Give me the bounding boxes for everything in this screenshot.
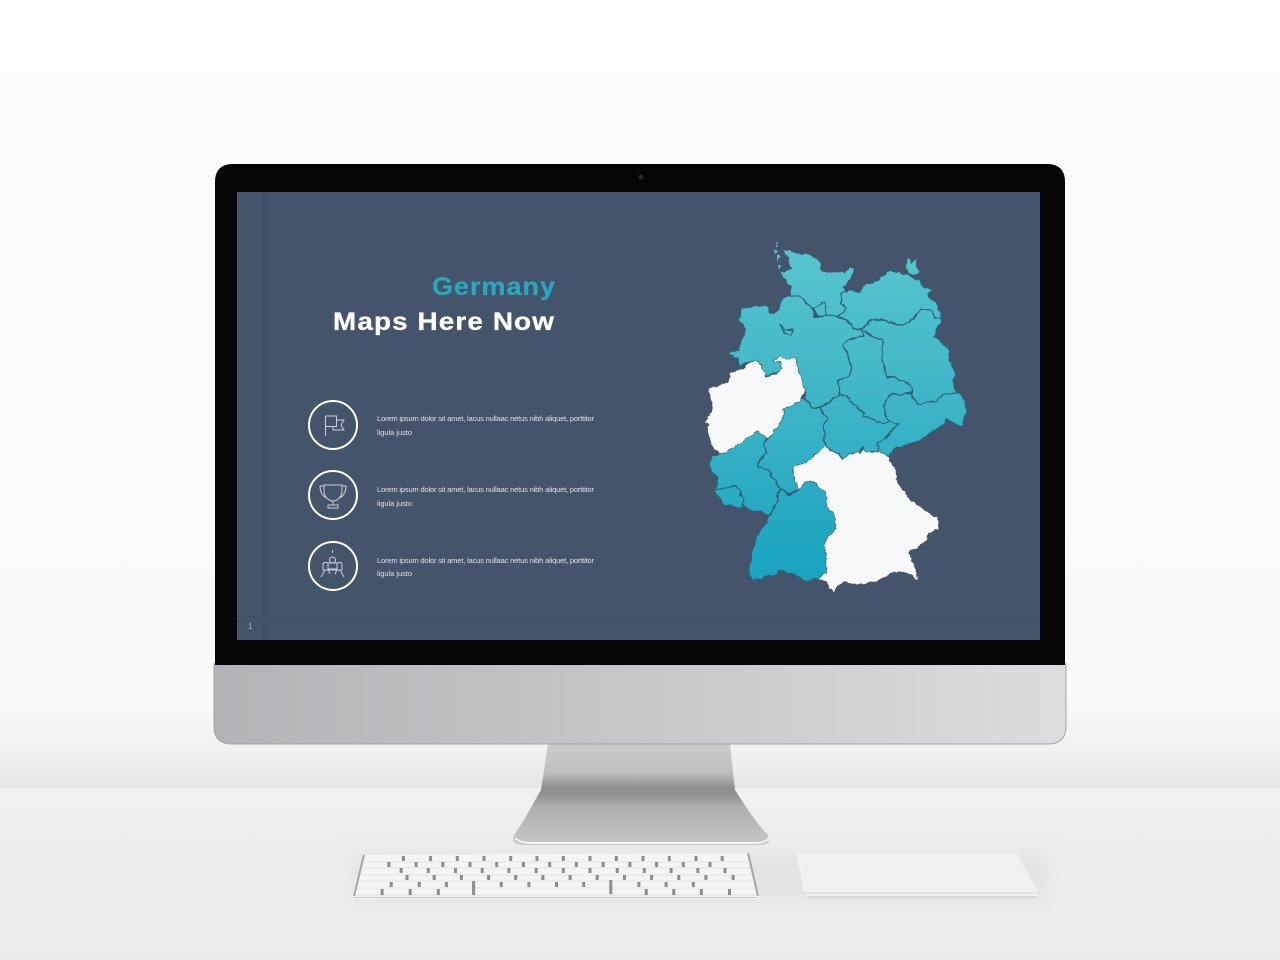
text block 3: ligula justo: [377, 569, 412, 578]
desk shadow under accessories: [350, 850, 1050, 902]
region: Saxony: [877, 393, 966, 457]
webcam: [638, 174, 644, 180]
icon: flag in circle: [309, 401, 357, 449]
text block 3: [377, 556, 594, 578]
text block 3: Lorem ipsum dolor sit amet, lacus nullaac netus nibh aliquet, porttitor: [377, 556, 594, 565]
region: North Sea islands: [775, 243, 781, 271]
region: Hesse: [758, 398, 827, 493]
title line: Germany: Germany: [432, 273, 556, 301]
background: desk: [0, 788, 1280, 960]
screen: slide: [237, 192, 1040, 640]
region: Baden-Wuerttemberg: [748, 481, 837, 582]
region: Brandenburg: [862, 307, 957, 404]
region: North Rhine-Westphalia: [705, 357, 805, 453]
region: Schleswig-Holstein: [783, 251, 854, 317]
text block 1: Lorem ipsum dolor sit amet, lacus nullaac netus nibh aliquet, porttitor: [377, 414, 594, 423]
text block 2: ligula justo: [377, 499, 412, 508]
region: Saxony-Anhalt: [838, 329, 912, 424]
monitor bezel: [215, 164, 1065, 665]
region: Mecklenburg-Vorpommern: [838, 271, 942, 329]
monitor chin: [214, 664, 1066, 744]
text block 1: [377, 414, 594, 437]
keyboard keys: [382, 856, 733, 895]
region: Rhineland-Palatinate: [708, 430, 780, 516]
text block 2: Lorem ipsum dolor sit amet, lacus nullaac netus nibh aliquet, porttitor: [377, 485, 594, 494]
monitor stand: [513, 744, 769, 845]
region: Ruegen island: [905, 257, 920, 275]
trackpad: [797, 853, 1038, 897]
icon: figure in circle: [309, 542, 357, 590]
slide number: 1: [248, 622, 253, 631]
region: Hamburg: [813, 302, 827, 317]
monitor: [214, 164, 1066, 744]
region: Saarland: [715, 486, 743, 508]
text block 1: ligula justo: [377, 428, 412, 437]
keyboard: [352, 853, 759, 899]
icon: trophy in circle: [309, 471, 357, 519]
region: Bremen: [779, 325, 792, 335]
title: [333, 273, 556, 336]
text block 2: [377, 485, 594, 508]
title line: Maps Here Now: Maps Here Now: [333, 308, 555, 336]
region: Bavaria: [793, 447, 938, 592]
region: Thuringia: [818, 395, 899, 460]
region: Lower Saxony: [729, 296, 863, 408]
map of Germany: [705, 243, 966, 592]
